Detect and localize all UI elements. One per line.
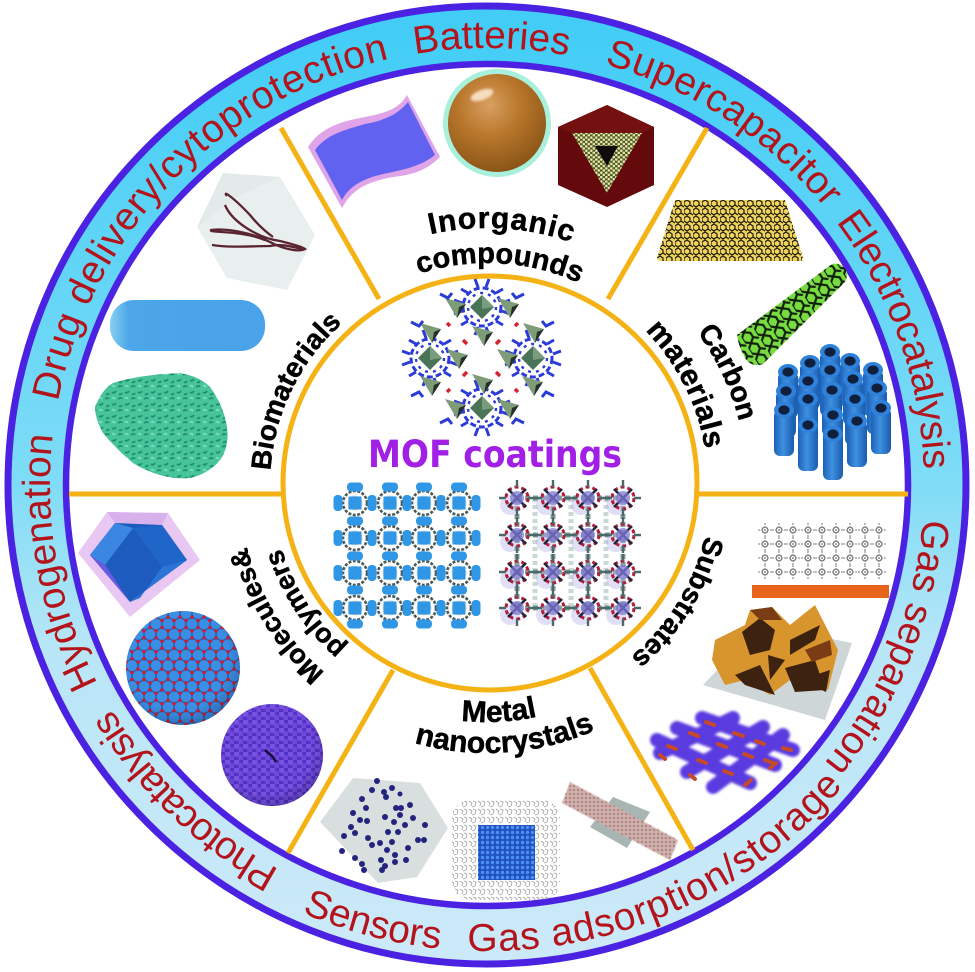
- icon: carbon nanotube: [737, 264, 847, 365]
- icon: tilted rod with plate: [562, 782, 678, 860]
- icon: coated sheet: [308, 95, 440, 208]
- application label: Gas separation: Gas separation: [826, 522, 948, 772]
- application label: Drug delivery/cytoprotection: Drug delivery/cytoprotection: [32, 40, 387, 399]
- label: Biomaterials: Biomaterials: [251, 315, 340, 469]
- label: Metal nanocrystals: nanocrystals: [416, 716, 593, 758]
- gold spokes and center circle: [69, 128, 908, 853]
- icon: blue tube array: [774, 344, 891, 480]
- center MOF structure: red and violet lattice: [499, 480, 641, 626]
- icon: blue core with molecular halo: [452, 800, 560, 900]
- label: Molecules & polymers: Molecules&: [231, 548, 324, 686]
- title: MOF coatings: MOF coatings: [368, 433, 622, 476]
- icon: blue capsule: [110, 300, 265, 351]
- center MOF structure: blue lattice: [334, 482, 480, 628]
- application label: Batteries: Batteries: [414, 21, 569, 54]
- label: Metal nanocrystals: Metal: [462, 695, 536, 722]
- icon: purple bumpy sphere: [221, 704, 323, 806]
- center MOF structure: top: [402, 279, 561, 436]
- icon: polyhedron with strands: [197, 173, 315, 290]
- label: Carbon materials: materials: [646, 321, 722, 448]
- icon: graphene sheet: [657, 200, 803, 261]
- application label: Hydrogenation: Hydrogenation: [22, 436, 96, 692]
- label: Inorganic compounds: Inorganic: [428, 212, 574, 241]
- icon: nanoparticles in polyhedron: [320, 778, 448, 883]
- label: Inorganic compounds: compounds: [417, 247, 582, 282]
- label: Carbon materials: Carbon: [700, 324, 753, 420]
- icon: purple mesh: [657, 718, 793, 787]
- icon: coated blue polyhedron: [78, 512, 200, 617]
- icon: gold flakes on plate: [703, 605, 852, 720]
- label: Inorganic compounds: [417, 212, 582, 282]
- application label: Electrocatalysis: Electrocatalysis: [838, 208, 951, 468]
- icon: blue and red ball sphere: [126, 611, 240, 725]
- icon: coated sphere: [443, 69, 551, 177]
- application label: Gas adsorption/storage: Gas adsorption/storage: [469, 776, 839, 952]
- application label: Photocatalysis: Photocatalysis: [97, 712, 276, 892]
- label: Substrates: Substrates: [633, 538, 722, 666]
- icon: green bumpy particle: [95, 373, 228, 478]
- label: Molecules & polymers: polymers: [269, 550, 349, 658]
- icon: hexagon with triangle core: [558, 105, 654, 207]
- application label: Supercapacitor: Supercapacitor: [608, 41, 841, 203]
- icon: framework film on orange substrate: [752, 523, 889, 598]
- application label: Sensors: Sensors: [306, 891, 440, 948]
